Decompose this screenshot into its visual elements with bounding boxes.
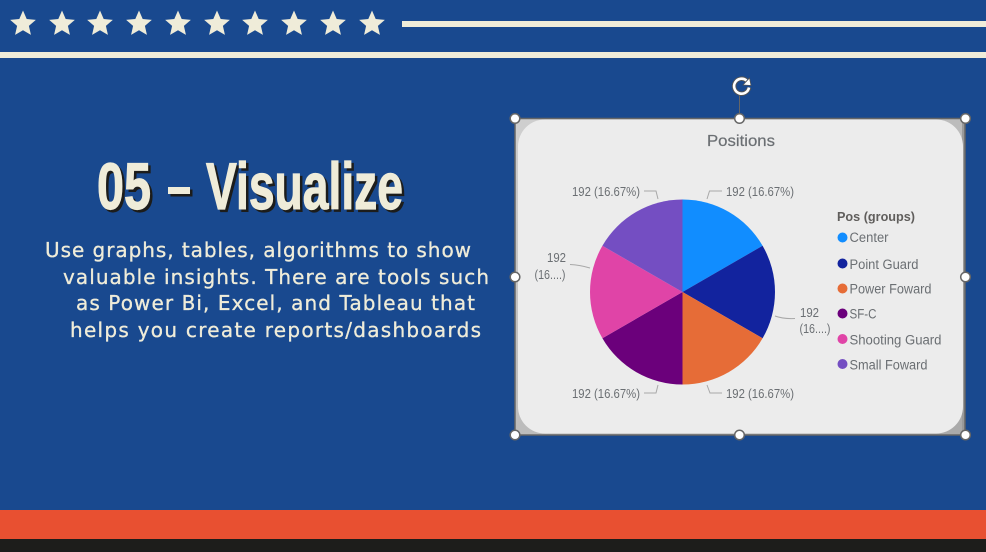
- data labels: 192 (16.67%): [726, 184, 794, 199]
- legend: Small Foward: [850, 358, 928, 372]
- legend: Point Guard: [850, 257, 918, 272]
- header rule short: [402, 21, 986, 27]
- selection handles: [510, 114, 970, 440]
- title: Visualize: [208, 152, 406, 226]
- chart panel: [510, 78, 970, 440]
- data labels: 192: [800, 305, 819, 320]
- leader lines: [570, 191, 795, 393]
- data labels: 192 (16.67%): [572, 386, 640, 401]
- footer black band: [0, 539, 986, 552]
- data labels: 192 (16.67%): [726, 386, 794, 401]
- legend: Power Foward: [850, 282, 932, 296]
- data labels: (16....): [800, 321, 830, 336]
- chart title: Positions: [707, 133, 775, 150]
- panel backing: [515, 118, 965, 436]
- legend: Shooting Guard: [850, 332, 942, 348]
- header rule long: [0, 52, 986, 58]
- body text: valuable insights. There are tools such: [63, 265, 489, 289]
- legend: [837, 209, 942, 372]
- panel card: [518, 120, 963, 434]
- title: 05: [97, 149, 151, 223]
- rotate handle stem: [738, 94, 740, 118]
- body text: as Power Bi, Excel, and Tableau that: [76, 291, 475, 315]
- legend: Center: [850, 230, 889, 245]
- title: Visualize: [206, 149, 403, 223]
- body text: Use graphs, tables, algorithms to show: [45, 238, 471, 262]
- data labels: 192: [547, 250, 566, 265]
- body text: [45, 238, 489, 342]
- title: 05: [100, 152, 154, 226]
- pie chart: [590, 200, 775, 384]
- data labels: (16....): [534, 267, 566, 282]
- header stars: [10, 10, 385, 35]
- data labels: 192 (16.67%): [572, 184, 640, 199]
- footer orange band: [0, 510, 986, 539]
- legend: Pos (groups): [837, 209, 915, 224]
- selection frame: [515, 118, 965, 435]
- body text: helps you create reports/dashboards: [70, 318, 481, 342]
- panel frame right shadow: [962, 119, 965, 435]
- title: [97, 149, 406, 226]
- legend: SF-C: [850, 306, 877, 322]
- icon: rotate handle: [734, 78, 751, 94]
- data labels: [534, 184, 830, 401]
